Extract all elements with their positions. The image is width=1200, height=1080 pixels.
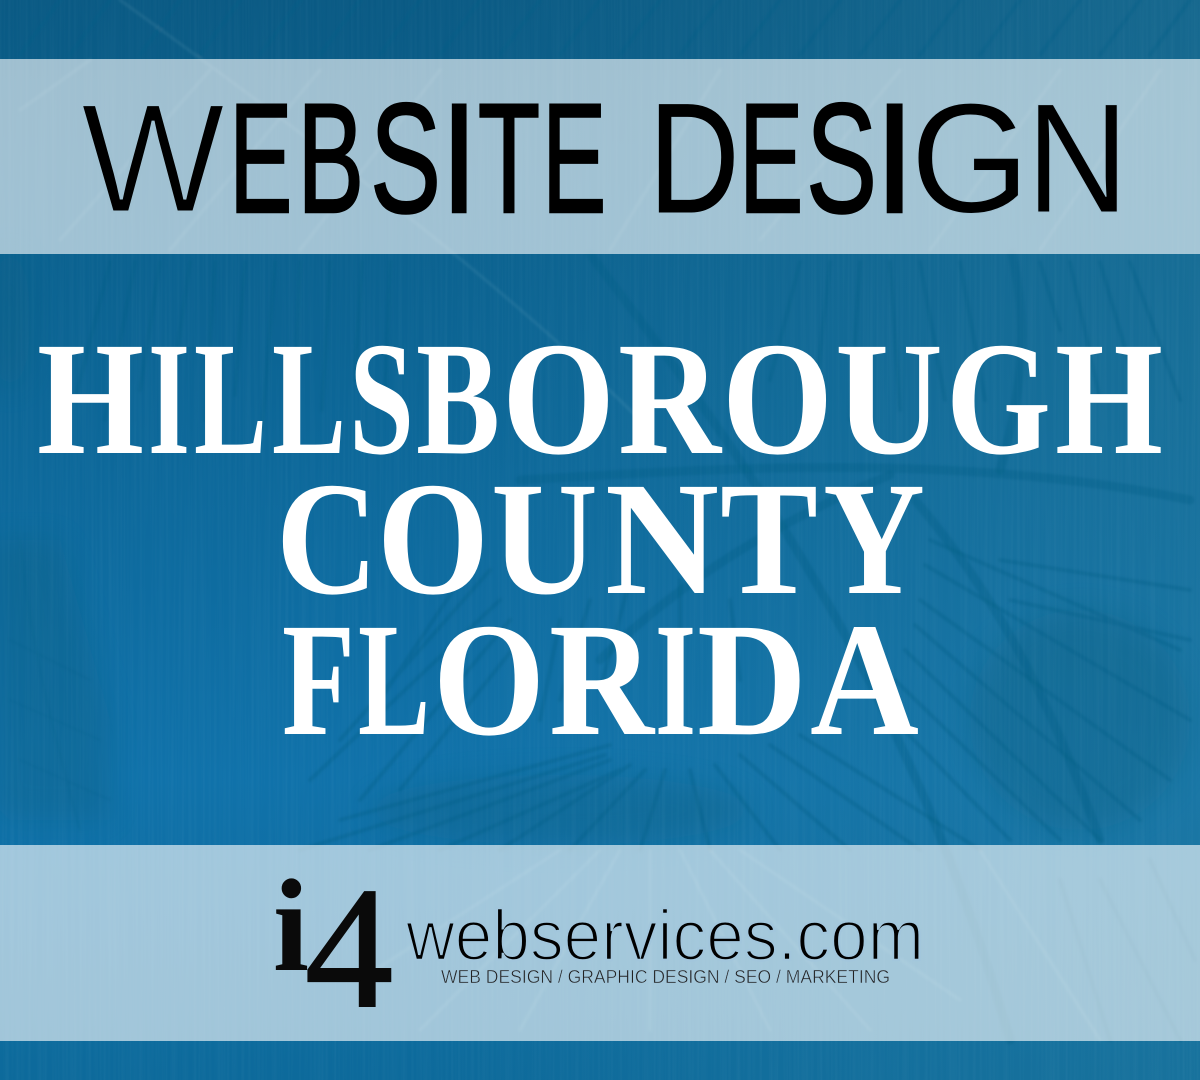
line: hillsborough: U [835,310,943,489]
line: hillsborough: G [946,310,1051,489]
line: county: T [720,450,818,629]
line: florida: I [655,591,696,770]
line: county: N [605,450,719,629]
line: hillsborough: I [148,310,190,489]
logo mark: 4: 4 [305,853,393,1044]
heading: website design: T [478,72,540,246]
heading: website design: N [1026,72,1129,246]
line: hillsborough: B [416,310,500,489]
heading: website design: S [806,72,877,246]
line: florida: F [282,591,355,770]
heading: website design: G [910,72,1030,246]
heading: website design: W [81,72,225,246]
line: florida: A [810,591,919,770]
line: county: O [377,450,489,629]
heading: website design: I [874,72,915,246]
heading: website design: D [649,72,739,246]
top band [0,59,1200,254]
line: hillsborough: O [722,310,833,489]
line: florida: D [697,591,807,770]
heading: website design: E [739,72,803,246]
heading: website design: E [542,72,606,246]
hazy tree on left [0,250,1190,845]
heading: website design: B [297,72,364,246]
heading: website design: I [440,72,478,246]
bottom band [0,845,1200,1041]
heading: location [37,310,1163,770]
logo mark: i: i [273,852,309,999]
line: hillsborough: L [272,310,346,489]
line: florida: O [433,591,545,770]
line: hillsborough: R [618,310,723,489]
line: hillsborough: H [1055,310,1163,489]
heading: website design: E [229,72,292,246]
line: hillsborough: H [37,310,144,489]
logo: i4 webservices [273,852,924,1044]
line: florida: R [549,591,656,770]
line: florida: L [358,591,430,770]
heading: website design: S [370,72,441,246]
tagline: WEB DESIGN / GRAPHIC DESIGN / SEO / MARKETING [441,967,890,987]
line: hillsborough: L [194,310,267,489]
line: county: C [276,450,378,629]
logo wordmark: webservices.com [405,897,924,976]
line: hillsborough: O [502,310,615,489]
line: county: Y [823,450,925,629]
line: county: U [491,450,598,629]
line: hillsborough: S [349,310,414,489]
